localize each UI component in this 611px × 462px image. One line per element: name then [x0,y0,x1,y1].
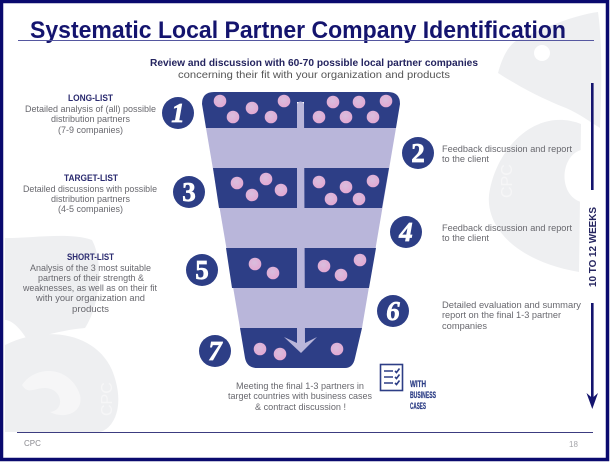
label: with business cases: WITH [410,379,426,390]
watermark: left logo [5,236,118,432]
band 5 [226,248,376,288]
text: short-list: partners of their strength & [38,273,144,283]
text: short-list [22,252,157,314]
badge 5 [186,254,218,286]
centre arrow [284,102,317,353]
footer rule [17,432,593,433]
timeline arrow [586,83,599,409]
label: with business cases: CASES [410,401,426,412]
text: target-list: Detailed discussions with possible [23,184,157,194]
text: step 6: report on the final 1-3 partner [442,310,561,320]
text: short-list: SHORT-LIST [67,252,114,263]
text: step 2: to the client [442,154,489,164]
badge 1 [162,97,194,129]
badge 5: 5 [195,255,209,285]
timeline label: 10 TO 12 WEEKS [587,207,599,287]
label: with business cases: BUSINESS [410,390,436,401]
band 3 [213,168,389,208]
text: long-list: distribution partners [51,114,130,124]
badge 4: 4 [398,217,413,247]
text: long-list: LONG-LIST [68,93,113,104]
text: step 6: companies [442,321,487,331]
text: step 6 [442,300,581,331]
badge 1: 1 [171,98,185,128]
page number: 18 [569,440,578,449]
text: step 7: & contract discussion ! [255,402,346,412]
text: step 4 [442,223,572,243]
subtitle [150,57,478,81]
badge 3 [173,176,205,208]
watermark: right logo: CPC [499,164,516,198]
label: with business cases [410,379,436,412]
subtitle: concerning their fit with your organization and products [178,69,450,81]
title rule [18,40,594,41]
badge 6: 6 [386,296,400,326]
badge 2 [402,137,434,169]
text: step 2 [442,144,572,164]
subtitle: Review and discussion with 60-70 possible local partner companies [150,57,478,69]
text: step 7: Meeting the final 1-3 partners in [236,381,364,391]
footer source: CPC [24,439,41,448]
text: short-list: Analysis of the 3 most suitable [30,263,151,273]
text: step 6: Detailed evaluation and summary [442,300,581,310]
text: short-list: products [72,304,109,314]
badge 2: 2 [411,138,425,168]
text: step 4: to the client [442,233,489,243]
text: step 4: Feedback discussion and report [442,223,572,233]
band 1 [202,92,400,128]
badge 3: 3 [182,177,196,207]
text: short-list: weaknesses, as well as on their fit [22,283,157,293]
text: long-list [25,93,156,135]
text: long-list: (7-9 companies) [58,125,123,135]
watermark: left logo: CPC [99,382,116,416]
badge 6 [377,295,409,327]
badge 7 [199,335,231,367]
badge 7: 7 [208,336,223,366]
dots [214,95,392,360]
band 7 [240,328,362,368]
funnel [202,92,400,368]
text: step 7: target countries with business cases [228,391,372,401]
funnel body [206,128,396,328]
title: Systematic Local Partner Company Identification [30,17,566,44]
icon: checklist [380,364,402,390]
badge 4 [390,216,422,248]
text: target-list: (4-5 companies) [58,204,123,214]
text: short-list: with your organization and [35,293,145,303]
text: long-list: Detailed analysis of (all) possible [25,104,156,114]
text: target-list: TARGET-LIST [64,173,118,184]
watermark: right logo [489,12,601,272]
text: step 7 [228,381,372,412]
text: target-list: distribution partners [51,194,130,204]
text: step 2: Feedback discussion and report [442,144,572,154]
text: target-list [23,173,157,214]
